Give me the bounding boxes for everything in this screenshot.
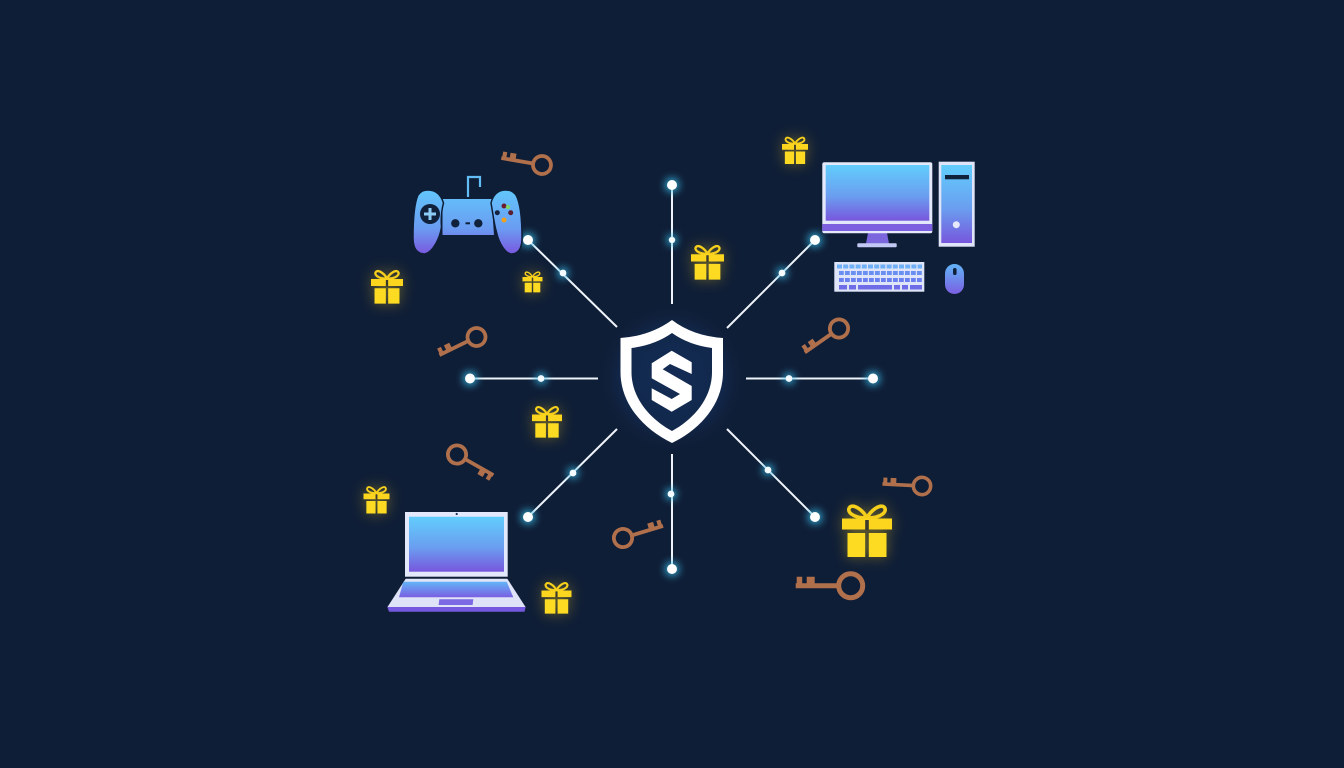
keyboard [834,262,924,292]
connector: upper right [727,235,820,328]
shield halo [596,302,748,454]
icon: key lower left [445,442,498,483]
icon: key lower right large [796,574,863,598]
icon: gift near top connector [691,246,724,280]
icon: gift lower far left [364,487,390,514]
icon: key top left [500,149,552,175]
connector: bottom [667,454,677,574]
connector: lower right [727,429,820,522]
icon: central shield with S emblem [620,320,723,443]
connector: lower left [523,429,617,522]
tower [939,162,975,247]
icon: key left [435,325,489,363]
monitor [822,162,932,247]
connector: top [667,180,677,304]
icon: laptop [387,512,526,612]
connector: left [465,374,598,384]
icon: game controller [413,177,522,254]
icon: desktop computer set [822,162,975,294]
icon: gift center left [532,407,562,438]
icon: key lower right small [882,475,931,495]
icon: key right of center [800,316,852,360]
mouse [945,264,964,294]
icon: small gift upper left [522,272,542,292]
icon: gift top right [782,138,808,164]
connector: upper left [523,235,617,327]
icon: gift bottom [542,583,572,614]
connector: right [746,374,878,384]
icon: key bottom center [612,517,666,549]
icon: gift far left [371,271,403,304]
icon: large gift lower right [842,506,892,557]
